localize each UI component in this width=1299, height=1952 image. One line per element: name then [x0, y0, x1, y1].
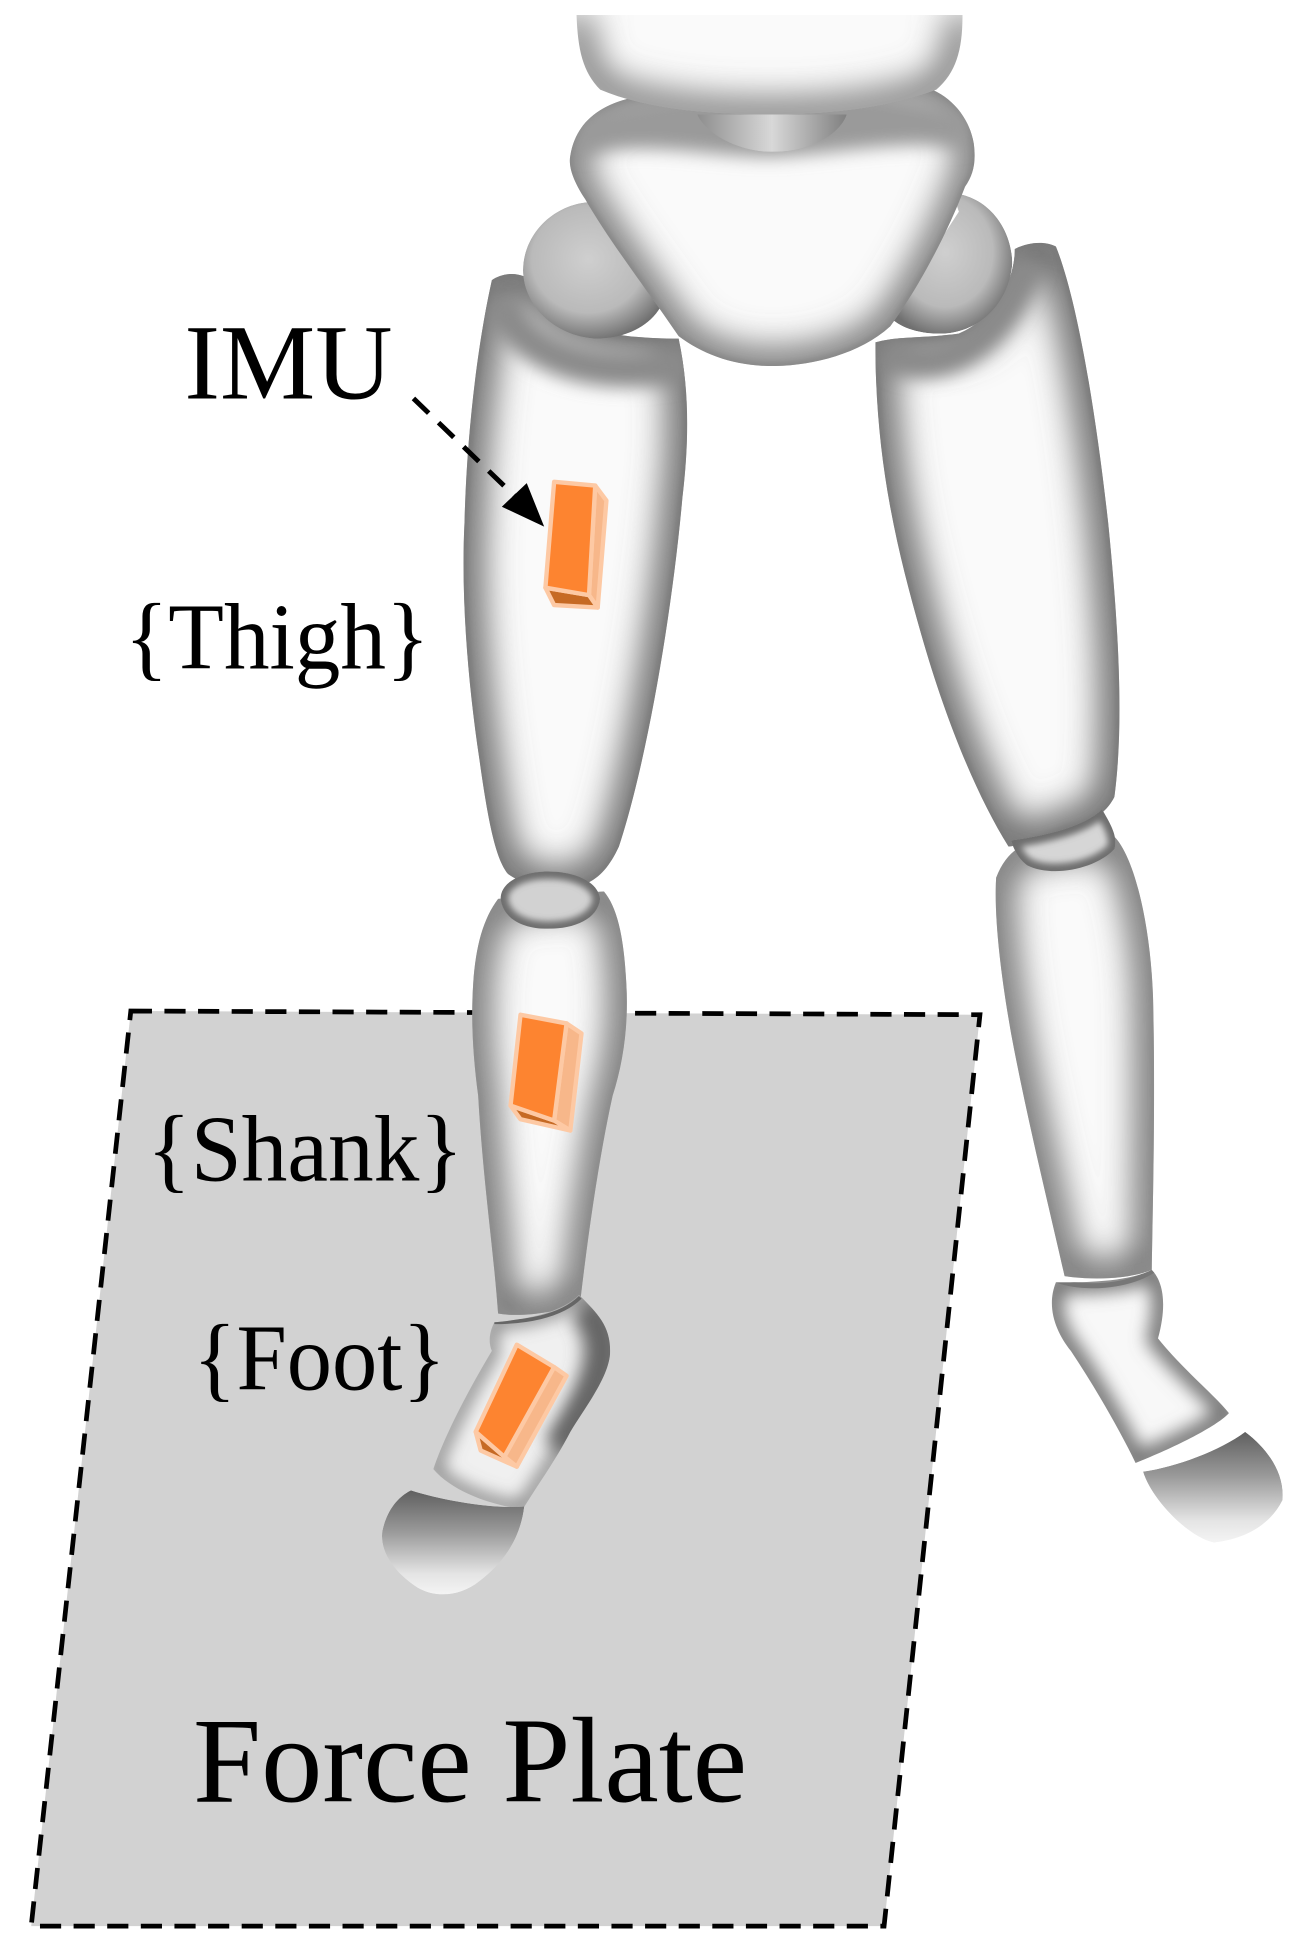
label: IMU: IMU [184, 304, 393, 422]
label: shank frame: {Shank} [147, 1097, 463, 1201]
torso [577, 15, 963, 115]
pelvis [570, 84, 975, 366]
left toe [382, 1490, 524, 1594]
left leg [382, 274, 691, 1594]
IMU sensor: foot [476, 1345, 567, 1467]
right toe [1143, 1432, 1283, 1543]
force plate [31, 1011, 980, 1926]
IMU sensor: thigh [545, 482, 606, 608]
arrow: IMU label to thigh sensor [413, 398, 544, 527]
left hip joint [523, 202, 669, 339]
right hip joint [890, 193, 1012, 334]
left knee [501, 872, 600, 929]
right leg [875, 243, 1283, 1543]
label: force plate: Force Plate [193, 1694, 747, 1829]
left ankle [433, 1295, 610, 1509]
label: foot frame: {Foot} [193, 1306, 446, 1410]
right thigh [875, 243, 1119, 847]
right ankle [1052, 1270, 1229, 1463]
waist joint [697, 115, 847, 152]
left thigh [464, 274, 691, 888]
label: thigh frame: {Thigh} [125, 586, 430, 690]
right knee [1011, 809, 1115, 871]
right shank [996, 837, 1154, 1278]
left shank [472, 891, 627, 1315]
IMU sensor: shank [511, 1015, 582, 1131]
